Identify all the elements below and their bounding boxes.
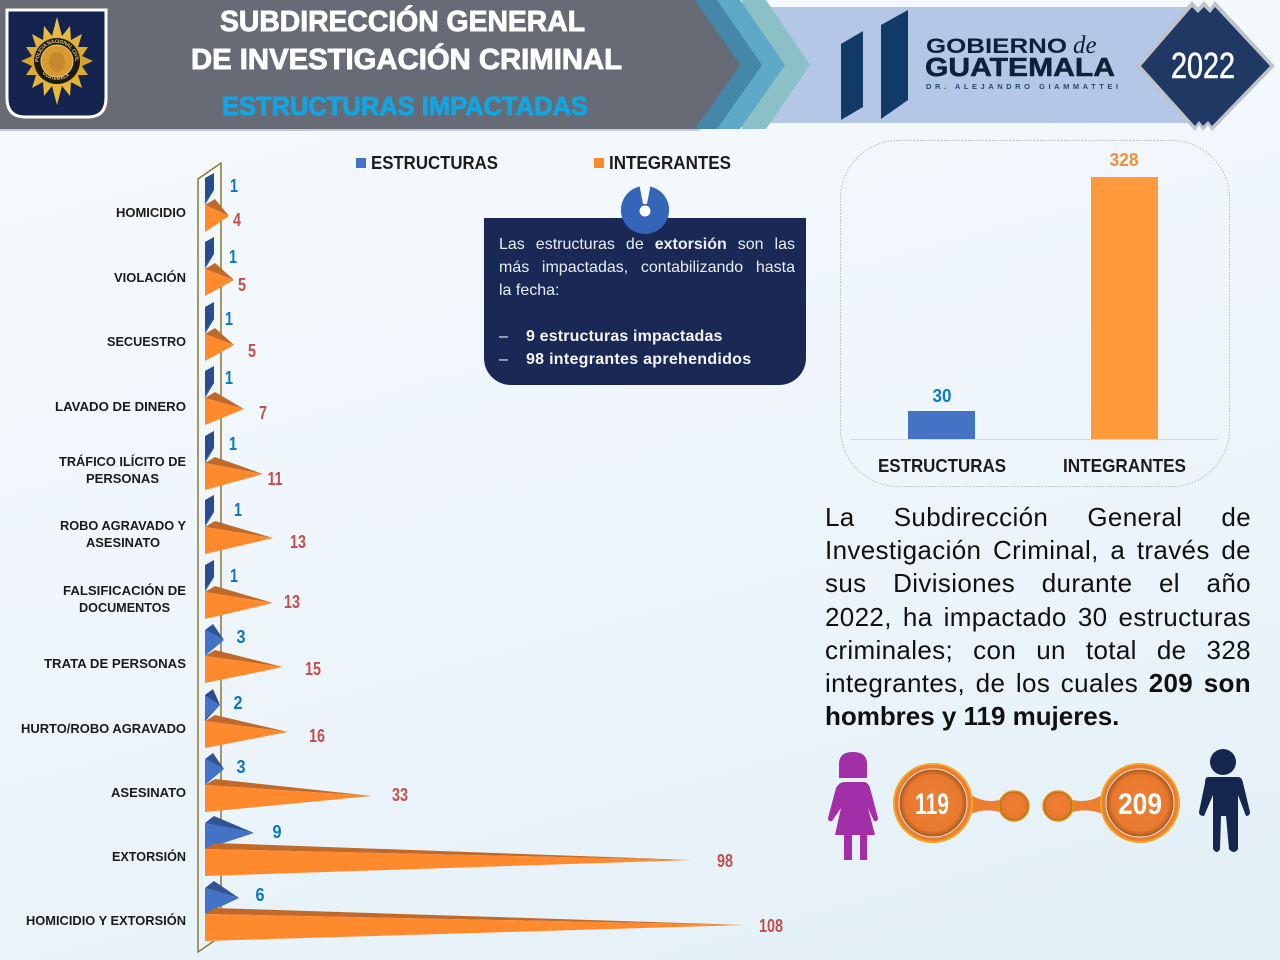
text block: summary paragraph: [825, 502, 1251, 731]
axis label: integrantes: INTEGRANTES: [1063, 456, 1186, 476]
government logo: de: [1073, 32, 1097, 59]
title line 2: DE INVESTIGACIÓN CRIMINAL: [191, 42, 622, 76]
row: secuestro: [107, 302, 256, 361]
connector: right circles: [1069, 793, 1105, 815]
row: trata de personas: 3: [236, 626, 246, 647]
legend: [356, 153, 731, 173]
row: violacion: [114, 237, 246, 296]
circle: men count: 209: [1118, 788, 1162, 821]
callout: extorsion note: Las estructuras de extorsión son las: [499, 236, 795, 253]
row: trafico ilicito: 11: [268, 468, 282, 489]
text block: summary paragraph: integrantes, de los cuales 209 son: [825, 668, 1251, 698]
circle: men count: [1101, 764, 1179, 842]
panel: totals bar chart: [840, 140, 1230, 486]
badge lettering top: POLICIA NACIONAL CIVIL: [35, 40, 79, 62]
row: extorsion: [112, 816, 733, 876]
circle: small left node: [999, 791, 1029, 821]
row: lavado de dinero: LAVADO DE DINERO: [55, 400, 186, 414]
row: secuestro: 1: [225, 308, 233, 329]
callout: extorsion note: 98 integrantes aprehendidos: [526, 351, 751, 368]
circle: women count: [894, 764, 972, 842]
row: trafico ilicito: [59, 431, 282, 490]
row: homicidio: HOMICIDIO: [116, 206, 186, 220]
row: falsificacion: [63, 560, 300, 619]
text block: summary paragraph: 2022, ha impactado 30 estructuras: [825, 602, 1251, 632]
government logo: DR. ALEJANDRO GIAMMATTEI: [926, 82, 1118, 91]
badge lettering bottom: GUATEMALA: [42, 72, 70, 80]
row: homicidio y extorsion: 108: [759, 915, 783, 936]
row: robo agravado y asesinato: 1: [234, 499, 242, 520]
chart frame: [198, 163, 221, 952]
icon: gold star: [21, 17, 93, 105]
row: asesinato: 33: [392, 784, 408, 805]
row: trafico ilicito: 1: [229, 433, 237, 454]
row: homicidio: 4: [233, 209, 242, 230]
icon: woman: [828, 752, 878, 860]
row: secuestro: 5: [248, 340, 256, 361]
row: asesinato: ASESINATO: [111, 786, 186, 800]
text block: summary paragraph: La Subdirección General de: [825, 502, 1251, 532]
row: violacion: 5: [238, 274, 246, 295]
header band: [0, 0, 1200, 131]
government logo: GUATEMALA: [925, 52, 1115, 82]
row: extorsion: EXTORSIÓN: [112, 849, 186, 864]
text block: summary paragraph: criminales; con un total de 328: [825, 635, 1251, 665]
icon: exclamation mark on alert: [621, 183, 669, 234]
row: trata de personas: 15: [305, 658, 321, 679]
government logo: GOBIERNO: [926, 35, 1067, 58]
text block: summary paragraph: hombres y 119 mujeres.: [825, 701, 1119, 731]
bar: integrantes: [1091, 177, 1158, 439]
row: falsificacion: 1: [230, 565, 238, 586]
connector: left circles: [968, 793, 1003, 815]
icon: alert circle: [621, 186, 669, 234]
callout: extorsion note: –: [499, 328, 508, 345]
row: trata de personas: TRATA DE PERSONAS: [44, 657, 186, 671]
row: homicidio y extorsion: HOMICIDIO Y EXTORSIÓN: [26, 913, 186, 928]
row: asesinato: 3: [236, 756, 246, 777]
circle: women count: 119: [915, 788, 949, 821]
title line 1: SUBDIRECCIÓN GENERAL: [220, 4, 585, 38]
row: falsificacion: FALSIFICACIÓN DE: [63, 583, 186, 598]
row: lavado de dinero: [55, 366, 267, 425]
row: homicidio: [116, 173, 242, 232]
row: homicidio: 1: [230, 175, 238, 196]
row: extorsion: 9: [272, 821, 282, 842]
row: trafico ilicito: PERSONAS: [86, 472, 159, 486]
subtitle: ESTRUCTURAS IMPACTADAS: [222, 91, 588, 121]
police badge logo: [6, 8, 108, 118]
callout: extorsion note: la fecha:: [499, 282, 559, 299]
row: robo agravado y asesinato: 13: [290, 531, 306, 552]
row: lavado de dinero: 1: [225, 367, 233, 388]
legend: ESTRUCTURAS: [371, 153, 498, 173]
row: homicidio y extorsion: 6: [256, 884, 264, 905]
value: 30: 30: [932, 386, 952, 406]
callout: extorsion note: –: [499, 351, 508, 368]
row: trata de personas: [44, 624, 321, 683]
row: falsificacion: DOCUMENTOS: [79, 601, 170, 615]
text block: summary paragraph: sus Divisiones durante el año: [825, 568, 1251, 598]
row: robo agravado y asesinato: [60, 495, 306, 554]
row: homicidio y extorsion: [26, 881, 783, 941]
icon: man: [1199, 749, 1250, 852]
row: robo agravado y asesinato: ASESINATO: [86, 536, 160, 550]
axis label: estructuras: ESTRUCTURAS: [878, 456, 1006, 476]
row: violacion: 1: [229, 246, 237, 267]
callout: extorsion note: más impactadas, contabilizando hasta: [499, 259, 795, 276]
year diamond: 2022: [1171, 45, 1235, 86]
bar: estructuras: [908, 411, 975, 439]
circle: small right node: [1043, 791, 1073, 821]
row: hurto robo agravado: 16: [309, 725, 325, 746]
row: asesinato: [111, 753, 408, 812]
callout: extorsion note: 9 estructuras impactadas: [526, 328, 723, 345]
row: hurto robo agravado: [21, 689, 325, 748]
text block: summary paragraph: Investigación Criminal, a través de: [825, 535, 1251, 565]
row: hurto robo agravado: HURTO/ROBO AGRAVADO: [21, 722, 186, 736]
row: secuestro: SECUESTRO: [107, 335, 186, 349]
year diamond: [1137, 1, 1275, 131]
row: trafico ilicito: TRÁFICO ILÍCITO DE: [59, 454, 186, 469]
row: lavado de dinero: 7: [259, 402, 267, 423]
callout: extorsion note: [484, 218, 806, 385]
row: falsificacion: 13: [284, 591, 300, 612]
row: violacion: VIOLACIÓN: [114, 270, 186, 285]
government logo: [841, 10, 1118, 120]
row: hurto robo agravado: 2: [234, 692, 242, 713]
legend: INTEGRANTES: [609, 153, 731, 173]
row: robo agravado y asesinato: ROBO AGRAVADO Y: [60, 519, 187, 533]
row: extorsion: 98: [717, 850, 733, 871]
value: 328: 328: [1110, 150, 1138, 170]
